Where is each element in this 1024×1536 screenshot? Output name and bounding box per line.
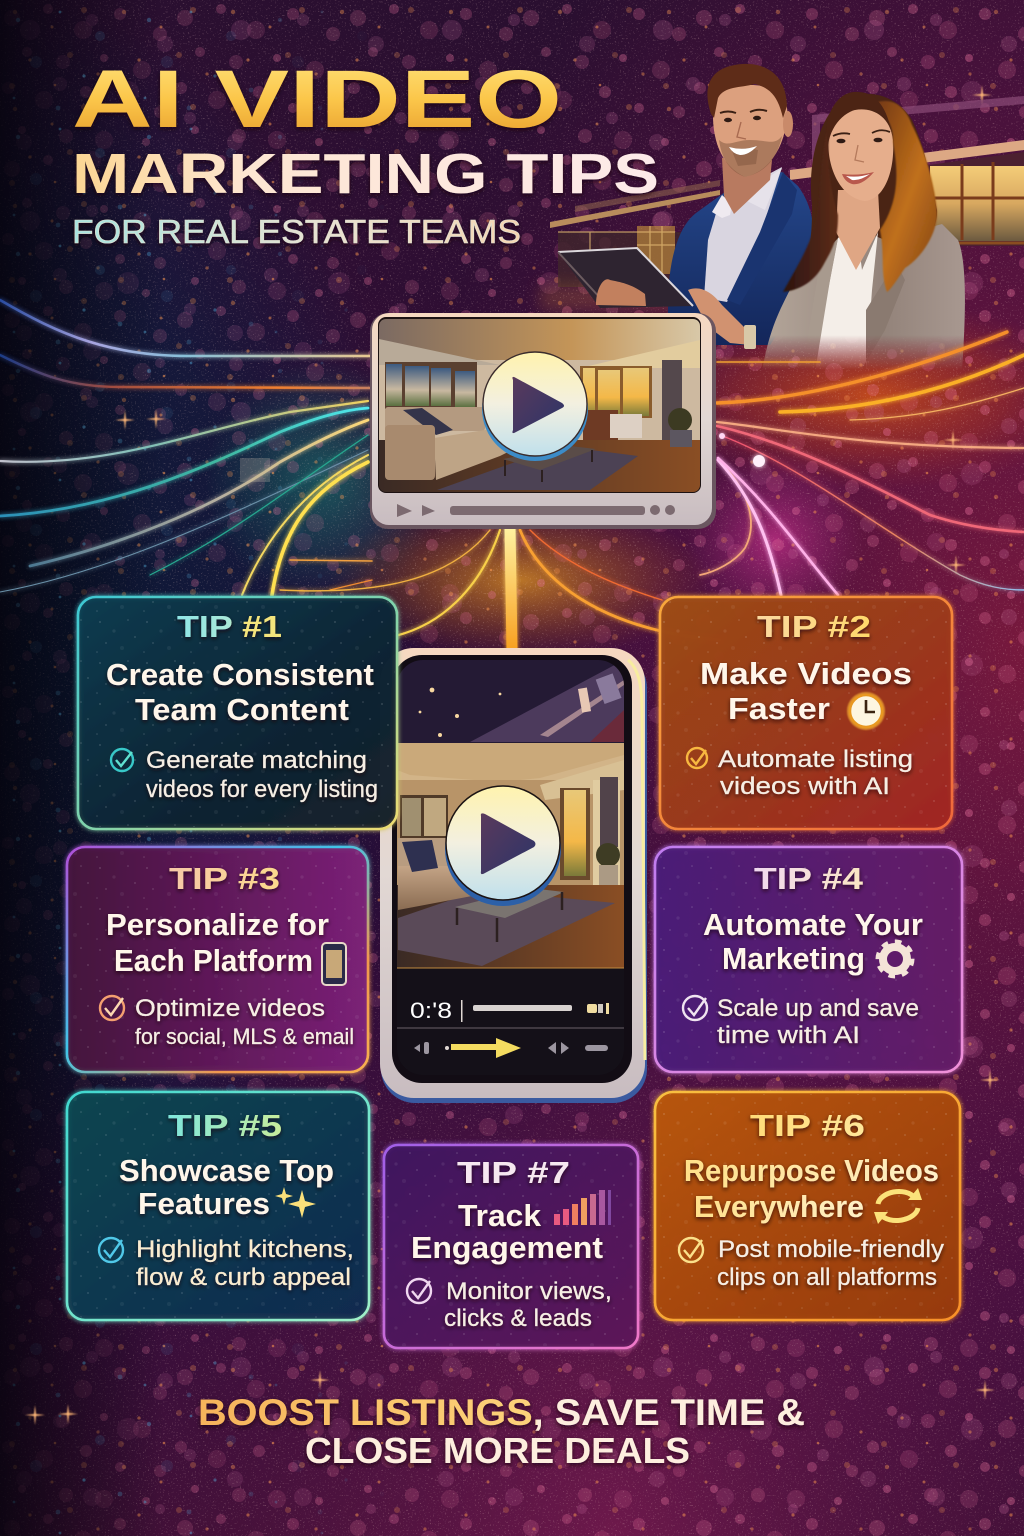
- player screen: [378, 317, 701, 493]
- phone play button: [445, 786, 561, 906]
- title line 2: MARKETING TIPS: [72, 142, 659, 206]
- tip 6 heading: Repurpose Videos: [684, 1153, 939, 1188]
- tip 1 heading: Team Content: [135, 692, 349, 727]
- tip 7 description: [444, 1278, 612, 1332]
- phone controls panel: [397, 968, 624, 970]
- tip 3 label: TIP #3: [169, 861, 280, 896]
- sofa: [385, 407, 485, 431]
- tip 6 heading: [684, 1153, 939, 1224]
- tip 2 card: [660, 597, 952, 829]
- tip 5 heading: Showcase Top: [119, 1153, 334, 1188]
- icon: gear: [878, 942, 912, 976]
- tip 1 heading: Create Consistent: [106, 657, 374, 692]
- man lapel: [727, 172, 797, 305]
- tip 1 heading: [106, 657, 374, 727]
- tip 6 heading: Everywhere: [694, 1189, 864, 1224]
- icon: check: [111, 749, 133, 771]
- smartphone: [380, 648, 647, 1103]
- phone sofa: [398, 838, 448, 866]
- icon: check: [683, 996, 707, 1020]
- tip 2 description: videos with AI: [720, 773, 890, 800]
- tip 5 heading: Features: [138, 1186, 270, 1221]
- man face features: [720, 110, 767, 155]
- holding hand: [596, 279, 646, 306]
- tip 2 description: Automate listing: [718, 746, 913, 773]
- phone scrub bar: [461, 1000, 609, 1022]
- icon: sparkles: [275, 1187, 316, 1218]
- tip 4 heading: Automate Your: [703, 907, 923, 942]
- tip 3 heading: [106, 907, 329, 978]
- phone yellow arrow: [445, 1038, 521, 1058]
- tip 7 label: TIP #7: [457, 1155, 570, 1190]
- building behind the team: [540, 96, 1024, 311]
- tip 2 heading: Faster: [728, 691, 830, 726]
- tip 3 description: [135, 995, 354, 1049]
- icon: check: [687, 748, 707, 768]
- man neck: [722, 158, 772, 214]
- footer call to action: [198, 1392, 805, 1471]
- light rays: left side: [0, 300, 372, 595]
- icon: bar chart: [554, 1190, 611, 1225]
- tip 1 card: [78, 597, 397, 829]
- phone time: 0:'8: [410, 998, 452, 1023]
- icon: refresh: [874, 1188, 922, 1224]
- light rays: right side: [700, 332, 1024, 595]
- tip 5 panel: [67, 1092, 369, 1320]
- tip 4 heading: Marketing: [722, 941, 865, 976]
- tip 7 heading: Track: [458, 1198, 542, 1233]
- tip 5 card: [67, 1092, 369, 1320]
- phone lower icons: [414, 1042, 608, 1054]
- woman jacket: [762, 224, 965, 372]
- footer call to action: CLOSE MORE DEALS: [305, 1430, 690, 1471]
- video player: [370, 313, 716, 529]
- man head: [713, 85, 788, 177]
- tip 7 heading: Engagement: [411, 1230, 603, 1265]
- icon: check: [407, 1279, 431, 1303]
- phone screen: [392, 655, 632, 1083]
- tip 3 heading: Each Platform: [114, 943, 313, 978]
- man blazer: [668, 172, 813, 345]
- icon: phone: [322, 943, 346, 985]
- table: [503, 446, 596, 470]
- plant: [668, 408, 692, 432]
- tip 1 description: Generate matching: [146, 747, 367, 774]
- illustration: tablet and hand: [558, 248, 756, 349]
- subtitle: FOR REAL ESTATE TEAMS: [72, 213, 521, 250]
- icon: check: [100, 996, 124, 1020]
- tip 3 card: [67, 847, 368, 1072]
- tip 1 panel: [78, 597, 397, 829]
- woman hair back: [810, 94, 937, 242]
- icon: check: [679, 1238, 703, 1262]
- phone body: [381, 654, 647, 1103]
- player play button: [482, 352, 588, 461]
- player frame: [370, 313, 716, 529]
- tip 3 description: Optimize videos: [135, 995, 325, 1022]
- woman top hair: [827, 92, 890, 145]
- tip 7 description: Monitor views,: [446, 1278, 612, 1305]
- pointing hand: [688, 288, 750, 345]
- tip 5 heading: [119, 1153, 334, 1221]
- woman face: [828, 109, 893, 201]
- tip 4 panel: [655, 847, 962, 1072]
- player room scene: [379, 319, 700, 495]
- light rays: from player down to tips: [280, 528, 720, 650]
- phone room scene: [398, 755, 624, 780]
- footer call to action: BOOST LISTINGS, SAVE TIME &: [198, 1392, 805, 1433]
- phone upper scene: [397, 660, 624, 743]
- title: [72, 54, 659, 250]
- player controls: [397, 504, 675, 517]
- tip 4 label: TIP #4: [754, 861, 864, 896]
- tip 2 label: TIP #2: [757, 609, 871, 644]
- tip 6 description: [717, 1236, 944, 1291]
- tip 5 description: flow & curb appeal: [136, 1264, 351, 1291]
- tip 2 description: [718, 746, 913, 800]
- woman blouse: [816, 232, 878, 367]
- woman left hair lock: [783, 120, 838, 292]
- tip 4 description: Scale up and save: [717, 995, 919, 1022]
- illustration: woman in grey blazer: [762, 92, 965, 372]
- tip 4 card: [655, 847, 962, 1072]
- tip 7 panel: [384, 1145, 638, 1348]
- tip 4 heading: [703, 907, 923, 976]
- tip 5 description: [136, 1236, 354, 1291]
- tip 3 description: for social, MLS & email: [135, 1024, 354, 1049]
- tip 3 heading: Personalize for: [106, 907, 329, 942]
- icon: check: [99, 1238, 123, 1262]
- icon: clock: [847, 692, 885, 730]
- tip 6 description: Post mobile-friendly: [718, 1236, 944, 1263]
- woman face features: [833, 130, 890, 184]
- tip 6 panel: [655, 1092, 960, 1320]
- tip 2 heading: [700, 656, 912, 726]
- light sparks: [719, 433, 765, 467]
- tip 6 card: [655, 1092, 960, 1320]
- tip 5 description: Highlight kitchens,: [136, 1236, 354, 1263]
- man hair: [707, 64, 787, 118]
- tip 6 label: TIP #6: [750, 1108, 865, 1143]
- man shirt: [704, 167, 782, 302]
- tip 2 heading: Make Videos: [700, 656, 912, 691]
- woman right hair lock: [878, 100, 938, 292]
- tip 4 description: [717, 995, 919, 1049]
- tip 2 panel: [660, 597, 952, 829]
- tip 7 card: [384, 1145, 638, 1348]
- woman neck: [836, 190, 880, 270]
- tip 1 description: [146, 747, 378, 803]
- tip 6 description: clips on all platforms: [717, 1264, 937, 1291]
- tip 7 heading: [411, 1198, 603, 1265]
- tip 4 description: time with AI: [717, 1022, 860, 1049]
- title line 1: AI VIDEO: [72, 54, 562, 145]
- illustration: man in blue blazer: [668, 64, 813, 345]
- phone table: [455, 888, 564, 918]
- tip 1 label: TIP #1: [177, 609, 282, 644]
- tip 3 panel: [67, 847, 368, 1072]
- tip 5 label: TIP #5: [168, 1108, 282, 1143]
- tip 7 description: clicks & leads: [444, 1305, 592, 1332]
- tip 1 description: videos for every listing: [146, 776, 378, 803]
